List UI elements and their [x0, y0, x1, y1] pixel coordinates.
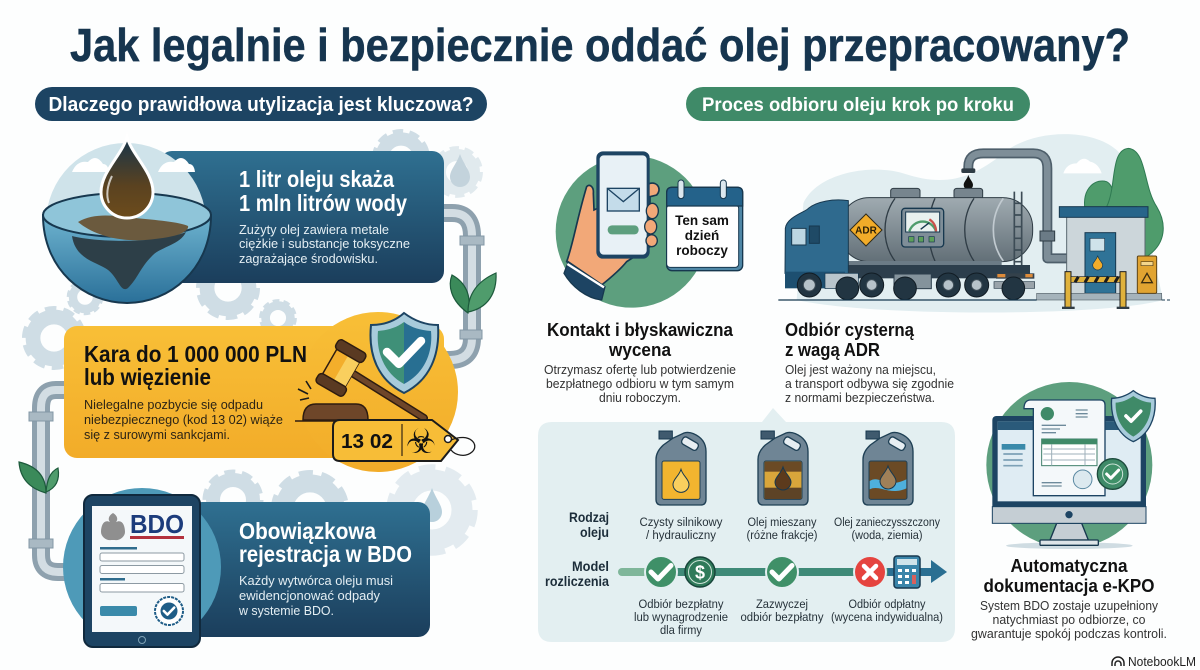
panel: penalty — [64, 312, 475, 472]
icon: tablet with BDO form — [84, 495, 200, 647]
description: gwarantuje spokój podczas kontroli. — [971, 626, 1167, 641]
description: Zużyty olej zawiera metale — [239, 222, 389, 237]
description: ewidencjonować odpady — [239, 588, 380, 603]
heading — [547, 319, 734, 360]
row label: oil type — [569, 509, 609, 540]
description: z normami bezpieczeństwa. — [785, 390, 935, 405]
row label: billing model: rozliczenia — [545, 573, 609, 589]
icon: tablet with BDO form: BDO — [130, 509, 184, 539]
heading: 1 mln litrów wody — [239, 190, 407, 216]
building — [1067, 215, 1145, 294]
barrier — [1062, 272, 1129, 309]
section heading: pickup process: Proces odbioru oleju krok po kroku — [702, 95, 1014, 116]
billing labels: odbiór bezpłatny — [740, 610, 824, 624]
oil type labels: / hydrauliczny — [646, 528, 717, 542]
description: natychmiast po odbiorze, co — [992, 612, 1146, 627]
calendar label: dzień — [685, 228, 719, 243]
icon: clean oil canister — [656, 431, 706, 505]
wheels — [797, 273, 1025, 300]
heading: rejestracja w BDO — [239, 541, 412, 567]
billing timeline — [618, 556, 947, 588]
description: ciężkie i substancje toksyczne — [239, 236, 410, 251]
shield — [1111, 391, 1155, 442]
calendar label: Ten sam — [675, 213, 729, 228]
step: contact and quote — [544, 151, 743, 405]
icon: hand with phone on green circle — [556, 151, 708, 308]
document — [1024, 400, 1105, 496]
calendar label: roboczy — [676, 243, 728, 258]
seal — [1097, 459, 1128, 489]
NotebookLM watermark: NotebookLM — [1128, 655, 1196, 669]
oil type labels — [640, 515, 941, 542]
description — [544, 362, 736, 405]
description: Otrzymasz ofertę lub potwierdzenie — [544, 362, 736, 377]
description: Olej jest ważony na miejscu, — [785, 362, 936, 377]
ADR diamond — [850, 214, 882, 246]
card background — [160, 151, 444, 283]
oil type labels: Olej zanieczysszczony — [834, 515, 941, 529]
heading: Automatyczna — [1010, 555, 1128, 576]
description — [785, 362, 954, 405]
right connecting pipe — [440, 213, 484, 360]
trees — [1085, 148, 1163, 257]
section heading: why disposal matters: Dlaczego prawidłowa utylizacja jest kluczowa? — [48, 94, 474, 116]
row label: oil type: Rodzaj — [569, 509, 609, 525]
scene background — [797, 134, 1163, 312]
illustration: tanker truck and collection point — [778, 134, 1170, 312]
row label: billing model: Model — [572, 558, 609, 574]
icon: dollar coin — [685, 557, 715, 587]
heading: z wagą ADR — [785, 339, 880, 360]
oil type labels: (woda, ziemia) — [852, 528, 922, 542]
oil type labels: Czysty silnikowy — [640, 515, 723, 529]
icon: dollar coin: $ — [695, 562, 705, 582]
heading — [239, 166, 407, 216]
section heading: pickup process — [686, 87, 1030, 121]
description: Nielegalne pozbycie się odpadu — [84, 397, 263, 412]
billing labels — [634, 597, 943, 637]
oil type labels: (różne frakcje) — [746, 528, 818, 542]
description — [84, 397, 283, 442]
icon: biohazard: ☣ — [406, 422, 436, 462]
heading: wycena — [608, 339, 672, 360]
icon: gavel — [295, 338, 424, 421]
illustration: tanker truck and collection point: ADR — [855, 226, 877, 237]
icon: leaf on right pipe — [450, 273, 496, 313]
description: zagrażające środowisku. — [239, 251, 378, 266]
panel background with pointer — [538, 408, 955, 642]
description: w systemie BDO. — [238, 603, 334, 618]
billing labels: Odbiór bezpłatny — [638, 597, 724, 611]
gauge — [902, 208, 944, 247]
icon: contaminated oil canister — [863, 431, 913, 505]
icon: waste code tag — [333, 420, 475, 462]
calendar label — [675, 213, 729, 258]
icon: water bowl with oil drop — [43, 137, 211, 303]
icon: waste code tag: 13 02 — [341, 431, 393, 453]
panel: one litre of oil — [43, 137, 444, 303]
icon: mixed oil canister — [758, 431, 808, 505]
description: System BDO zostaje uzupełniony — [980, 598, 1159, 613]
panel: oil type and billing model — [538, 408, 955, 642]
card background — [190, 502, 430, 637]
icon: check — [766, 556, 798, 588]
heading — [84, 341, 307, 390]
heading: Odbiór cysterną — [785, 319, 915, 340]
heading: 1 litr oleju skaża — [239, 166, 394, 192]
barrel — [1137, 256, 1157, 293]
description — [971, 598, 1167, 641]
road — [778, 298, 1037, 302]
icon: check — [645, 556, 677, 588]
left connecting pipe — [29, 390, 66, 572]
icon: monitor with document — [986, 382, 1155, 549]
description — [239, 222, 410, 266]
description: dniu roboczym. — [599, 390, 681, 405]
pipe — [968, 153, 1082, 258]
heading: Kara do 1 000 000 PLN — [84, 341, 307, 367]
icon: calculator — [894, 556, 920, 588]
row label: billing model — [545, 558, 609, 589]
tank — [891, 188, 920, 199]
heading: Obowiązkowa — [239, 518, 376, 544]
icon: eagle emblem — [101, 513, 125, 540]
panel: BDO registration — [63, 488, 430, 647]
description: niebezpiecznego (kod 13 02) wiąże — [84, 412, 283, 427]
icon: calendar — [667, 180, 743, 271]
heading: Kontakt i błyskawiczna — [547, 319, 734, 340]
heading — [984, 555, 1154, 596]
heading: lub więzienie — [84, 364, 211, 390]
description: się z surowymi sankcjami. — [84, 427, 230, 442]
section heading: why disposal matters — [35, 87, 487, 121]
heading — [785, 319, 915, 360]
billing labels: (wycena indywidualna) — [831, 610, 943, 624]
background gears — [26, 132, 480, 550]
billing labels: Zazwyczej — [756, 597, 808, 611]
description: bezpłatnego odbioru w tym samym — [546, 376, 734, 391]
icon: cross — [854, 556, 886, 588]
billing labels: dla firmy — [660, 623, 703, 637]
ladder — [1014, 192, 1022, 268]
card background — [64, 312, 458, 472]
icon: shield — [370, 313, 438, 393]
row label: oil type: oleju — [580, 524, 609, 540]
description: a transport odbywa się zgodnie — [785, 376, 954, 391]
step: automatic e-KPO documents — [971, 382, 1167, 641]
icon: leaf on left pipe — [19, 462, 58, 493]
chassis — [823, 265, 1030, 278]
description — [238, 573, 393, 618]
billing labels: Odbiór odpłatny — [848, 597, 926, 611]
step: tanker pickup — [778, 134, 1170, 405]
cab — [785, 200, 848, 273]
illustration backing circle — [63, 488, 221, 646]
billing labels: lub wynagrodzenie — [634, 610, 728, 624]
heading: dokumentacja e-KPO — [984, 575, 1154, 596]
oil type labels: Olej mieszany — [748, 515, 817, 529]
description: Każdy wytwórca oleju musi — [239, 573, 393, 588]
heading — [239, 518, 412, 567]
